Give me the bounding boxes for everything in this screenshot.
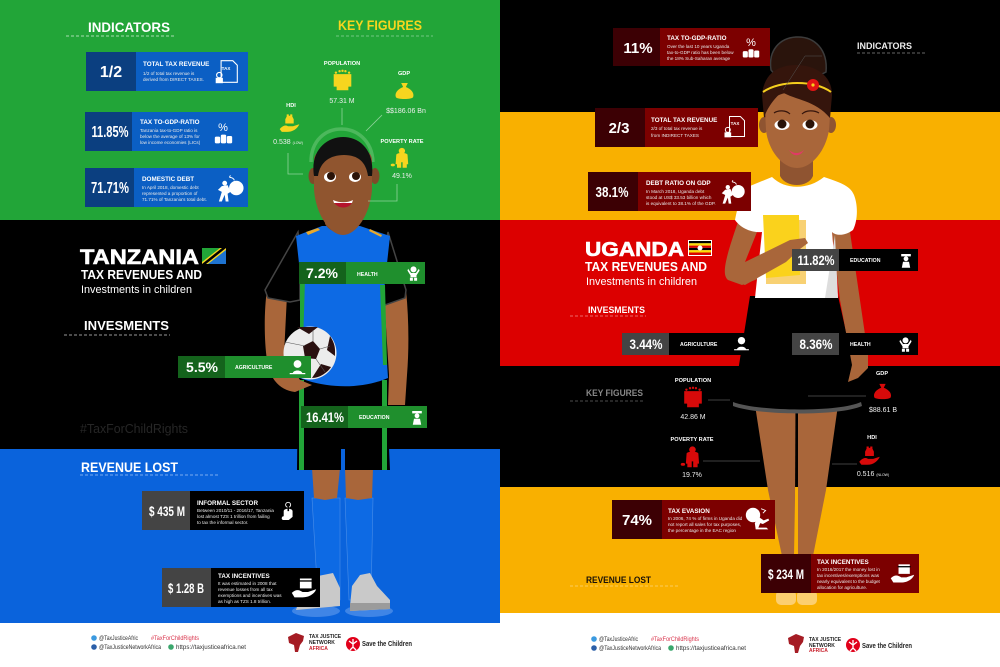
- key figure: GDP Uganda: GDP: [876, 371, 888, 377]
- card: total tax revenue 1/2: [86, 52, 248, 91]
- card: tax incentives $1.28 B: exemptions and incentives was: [218, 593, 282, 598]
- icon: poverty: [391, 148, 408, 168]
- heading: key figures Uganda: KEY FIGURES: [586, 388, 643, 398]
- icon: tax document: TAX: [731, 121, 739, 126]
- heading: key figures Tanzania: KEY FIGURES: [338, 17, 422, 33]
- key figure: GDP Tanzania: [366, 71, 426, 131]
- card: tax incentives $234 M: TAX INCENTIVES: [817, 559, 869, 566]
- logo: Save the Children: [346, 637, 412, 651]
- key figure: population Tanzania: POPULATION: [324, 61, 360, 67]
- footer: Tanzania social links and logos: https://taxjusticeafrica.net: [176, 644, 246, 651]
- card: tax to GDP ratio 11.85%: [85, 112, 248, 151]
- title: Uganda: [585, 239, 712, 288]
- icon: website: [668, 645, 674, 651]
- footer: Uganda social links and logos: https://taxjusticeafrica.net: [676, 645, 746, 652]
- card: tax to GDP ratio 11%: tax-to-GDP ratio has been below: [667, 50, 734, 55]
- logo: Tax Justice Network Africa: NETWORK: [309, 640, 335, 646]
- card: debt ratio on GDP 38.1%: is equivalent to 38.1% of the GDP.: [646, 201, 716, 206]
- bar: agriculture 3.44%: 3.44%: [630, 336, 663, 352]
- bar: agriculture 5.5%: AGRICULTURE: [235, 365, 273, 371]
- panel: Uganda background bands: [500, 0, 1000, 667]
- card: tax evasion 74%: 74%: [622, 512, 652, 529]
- bar: agriculture 3.44%: [622, 333, 749, 355]
- key figure: poverty rate Tanzania: POVERTY RATE: [380, 139, 424, 145]
- card: tax evasion 74%: [612, 500, 775, 539]
- icon: graduate: [412, 411, 422, 425]
- logo: Tax Justice Network Africa: TAX JUSTICE: [309, 634, 342, 640]
- card: tax to GDP ratio 11.85%: below the average of 13% for: [140, 134, 200, 139]
- key figure: poverty rate Tanzania: 49.1%: [392, 173, 412, 180]
- card: debt ratio on GDP 38.1%: 38.1%: [596, 184, 628, 201]
- logo: Save the Children: Save the Children: [862, 641, 912, 650]
- icon: running with bag: [746, 508, 769, 529]
- card: tax to GDP ratio 11%: [613, 28, 770, 66]
- footer: Tanzania social links and logos: #TaxForChildRights: [151, 635, 199, 642]
- boy jersey: [265, 226, 406, 386]
- girl forearm and hand: [735, 238, 808, 285]
- key figure: HDI Uganda: HDI: [867, 435, 877, 441]
- icon: farmer: [290, 360, 305, 374]
- icon: baby: [900, 337, 912, 352]
- bar: agriculture 5.5%: 5.5%: [186, 359, 219, 375]
- card: tax to GDP ratio 11.85%: low income economies (LICs): [140, 140, 201, 145]
- footer: Uganda social links and logos: @TaxJusticeAfric: [599, 636, 638, 643]
- icon: hand with figure: [859, 446, 880, 465]
- footer: Tanzania social links and logos: [91, 633, 412, 652]
- card: debt ratio on GDP 38.1%: In March 2018, Uganda debt: [646, 189, 705, 194]
- card: domestic debt 71.71%: 71.71%: [91, 180, 129, 197]
- footer: Tanzania social links and logos: @TaxJusticeNetworkAfrica: [99, 644, 161, 651]
- card: informal sector $435 M: lost almost TZS 1 trillion from failing: [197, 514, 270, 519]
- card: total tax revenue 1/2: TOTAL TAX REVENUE: [143, 61, 209, 68]
- logo: Tax Justice Network Africa: TAX JUSTICE: [809, 637, 842, 643]
- bar: education 11.82%: [792, 249, 918, 271]
- icon: money bag: [396, 83, 413, 99]
- key figure: GDP Tanzania: $$186.06 Bn: [386, 108, 426, 115]
- panel: Tanzania background bands: [0, 0, 500, 667]
- icon: percent and coins: %: [218, 122, 228, 134]
- icon: gift in hand: [292, 578, 316, 597]
- footer: Tanzania social links and logos: @TaxJusticeAfric: [99, 635, 138, 642]
- heading: revenue lost Tanzania: REVENUE LOST: [81, 459, 178, 475]
- card: tax incentives $1.28 B: $ 1.28 B: [168, 580, 204, 596]
- key figure: poverty rate Tanzania: [368, 139, 424, 201]
- card: total tax revenue 2/3: [595, 108, 758, 147]
- heading: indicators Tanzania: INDICATORS: [88, 19, 170, 35]
- card: debt ratio on GDP 38.1%: DEBT RATIO ON GDP: [646, 180, 711, 187]
- logo: Save the Children: Save the Children: [362, 639, 412, 648]
- title: Uganda: UGANDA: [585, 239, 684, 261]
- icon: gift in hand: [891, 564, 914, 583]
- bar: health 7.2%: HEALTH: [357, 272, 378, 278]
- card: tax to GDP ratio 11.85%: TAX TO-GDP-RATIO: [140, 119, 200, 126]
- card: tax to GDP ratio 11%: Over the last 10 years Uganda: [667, 44, 730, 49]
- card: tax evasion 74%: the percentage in the EAC region: [668, 528, 736, 533]
- icon: hand with figure: [280, 114, 299, 132]
- card: tax to GDP ratio 11%: 11%: [623, 40, 653, 57]
- icon: graduate: [901, 254, 911, 268]
- bar: health 8.36%: [792, 333, 918, 355]
- key figure: GDP Tanzania: GDP: [398, 71, 410, 77]
- hashtag: Tanzania: #TaxForChildRights: [80, 422, 188, 436]
- icon: baby: [408, 266, 420, 281]
- icon: poverty: [681, 446, 699, 467]
- icon: businessman: [282, 502, 293, 520]
- card: tax incentives $234 M: $ 234 M: [768, 566, 804, 582]
- title: Tanzania: TANZANIA: [80, 246, 199, 269]
- heading: investments Uganda: [570, 305, 646, 316]
- key figure: HDI Tanzania: [273, 103, 303, 174]
- card: tax incentives $234 M: tax incentives/exemptions was: [817, 573, 880, 578]
- girl skirt: [733, 296, 862, 414]
- card: domestic debt 71.71%: 71.71% of Tanzania's total debt.: [142, 197, 207, 202]
- logo: Tax Justice Network Africa: [288, 633, 342, 652]
- icon: percent and coins: %: [746, 37, 756, 49]
- key figure: population Tanzania: 57.31 M: [329, 98, 355, 105]
- card: domestic debt 71.71%: In April 2018, domestic debt: [142, 185, 199, 190]
- key figure: population Uganda: 42.86 M: [680, 414, 706, 421]
- card: debt ratio on GDP 38.1%: [588, 172, 751, 211]
- card: tax incentives $1.28 B: It was estimated in 2008 that: [218, 581, 277, 586]
- bar: agriculture 5.5%: [178, 356, 311, 378]
- icon: population: [684, 387, 702, 407]
- card: tax incentives $234 M: allocation for agriculture.: [817, 585, 867, 590]
- card: informal sector $435 M: INFORMAL SECTOR: [197, 500, 258, 507]
- card: informal sector $435 M: Between 2010/11 - 2016/17, Tanzania: [197, 508, 274, 513]
- icon: money bag: [874, 384, 891, 399]
- heading: investments Tanzania: INVESMENTS: [84, 318, 169, 333]
- girl upper left arm: [725, 222, 770, 285]
- icon: twitter: [91, 635, 97, 641]
- card: total tax revenue 1/2: 1/2 of total tax revenue is: [143, 71, 195, 76]
- bar: education 16.41%: [301, 406, 427, 428]
- title: Tanzania: [80, 246, 226, 296]
- card: informal sector $435 M: to tax the informal sector.: [197, 520, 248, 525]
- illustration: girl with book: [725, 37, 868, 605]
- icon: tax document: TAX: [222, 66, 230, 71]
- card: tax incentives $234 M: [761, 554, 919, 593]
- heading: revenue lost Uganda: REVENUE LOST: [586, 575, 651, 585]
- boy socks and shoes: [292, 498, 393, 617]
- footer: Uganda social links and logos: @TaxJusticeNetworkAfrica: [599, 645, 661, 652]
- card: debt ratio on GDP 38.1%: stood at US$ 33.53 billion which: [646, 195, 712, 200]
- icon: percent and coins: [215, 122, 232, 143]
- footer: Uganda social links and logos: #TaxForChildRights: [651, 636, 699, 643]
- card: total tax revenue 2/3: from INDIRECT TAXES: [651, 133, 699, 138]
- card: tax evasion 74%: In 2006, 74 % of firms in Uganda did: [668, 516, 743, 521]
- heading: revenue lost Uganda: [570, 575, 680, 586]
- card: total tax revenue 1/2: 1/2: [100, 64, 122, 81]
- key figure: HDI Tanzania: HDI: [286, 103, 296, 109]
- card: tax to GDP ratio 11.85%: 11.85%: [92, 124, 128, 141]
- bar: health 7.2%: 7.2%: [306, 265, 339, 281]
- icon: population: [334, 70, 351, 90]
- icon: tax document: [724, 116, 744, 137]
- bar: education 11.82%: EDUCATION: [850, 258, 881, 264]
- icon: twitter: [591, 636, 597, 642]
- card: informal sector $435 M: [142, 491, 304, 530]
- key figure: GDP Uganda: [808, 371, 897, 414]
- card: total tax revenue 2/3: TOTAL TAX REVENUE: [651, 117, 717, 124]
- card: informal sector $435 M: $ 435 M: [149, 503, 185, 519]
- icon: tax document: [216, 61, 237, 83]
- card: domestic debt 71.71%: [85, 168, 248, 207]
- heading: investments Uganda: INVESMENTS: [588, 305, 645, 315]
- card: domestic debt 71.71%: DOMESTIC DEBT: [142, 176, 194, 183]
- bar: education 16.41%: EDUCATION: [359, 415, 390, 421]
- bar: education 16.41%: 16.41%: [306, 409, 344, 425]
- icon: website: [168, 644, 174, 650]
- logo: Tax Justice Network Africa: NETWORK: [809, 643, 835, 649]
- logo: Tax Justice Network Africa: AFRICA: [809, 648, 828, 654]
- card: tax incentives $1.28 B: [162, 568, 320, 607]
- bar: health 7.2%: [299, 262, 425, 284]
- card: tax incentives $1.28 B: revenue losses from all tax: [218, 587, 273, 592]
- card: total tax revenue 2/3: 2/3: [609, 120, 629, 137]
- key figure: population Tanzania: [324, 61, 360, 125]
- heading: indicators Uganda: [857, 41, 925, 53]
- icon: facebook: [591, 645, 597, 651]
- boy arms: [265, 290, 408, 405]
- girl shirt: [735, 177, 857, 298]
- illustration: boy with football: [265, 129, 408, 617]
- girl right arm: [832, 232, 868, 382]
- girl head: [759, 37, 836, 185]
- key figure: poverty rate Uganda: POVERTY RATE: [670, 437, 714, 443]
- girl book: [763, 215, 806, 284]
- icon: man carrying debt: [722, 180, 745, 204]
- card: tax evasion 74%: TAX EVASION: [668, 508, 710, 515]
- bar: health 8.36%: HEALTH: [850, 342, 871, 348]
- key figure: population Uganda: POPULATION: [675, 378, 711, 384]
- title: Uganda: TAX REVENUES AND: [585, 260, 707, 274]
- bar: agriculture 3.44%: AGRICULTURE: [680, 342, 718, 348]
- heading: indicators Uganda: INDICATORS: [857, 41, 912, 51]
- card: domestic debt 71.71%: represented a proportion of: [142, 191, 198, 196]
- icon: facebook: [91, 644, 97, 650]
- boy head: [308, 129, 380, 235]
- title: Tanzania: TAX REVENUES AND: [81, 267, 202, 282]
- logo: Save the Children: [846, 638, 912, 652]
- card: tax incentives $1.28 B: as high as TZS 1.8 trillion.: [218, 599, 271, 604]
- icon: percent and coins: [743, 37, 759, 57]
- card: tax incentives $1.28 B: TAX INCENTIVES: [218, 573, 270, 580]
- boy shorts: [297, 380, 390, 470]
- title: Tanzania: Investments in children: [81, 284, 192, 296]
- title: Uganda: Investments in children: [586, 276, 697, 288]
- card: total tax revenue 2/3: 2/3 of total tax revenue is: [651, 126, 703, 131]
- card: tax to GDP ratio 11%: the 18% Sub-Saharan average: [667, 56, 731, 61]
- boy legs: [312, 468, 373, 500]
- key figure: GDP Uganda: $88.61 B: [869, 407, 897, 414]
- bar: health 8.36%: 8.36%: [800, 336, 833, 352]
- key figure: population Uganda: [675, 378, 730, 421]
- key figure: HDI Tanzania: 0.538 (LOW): [273, 139, 303, 146]
- girl feet: [776, 590, 817, 605]
- key figure: poverty rate Uganda: 19.7%: [682, 472, 702, 479]
- football: [284, 326, 336, 380]
- icon: Uganda flag: [688, 240, 712, 256]
- bar: education 11.82%: 11.82%: [798, 252, 835, 268]
- key figure: poverty rate Uganda: [670, 437, 760, 479]
- icon: man carrying debt: [218, 175, 244, 202]
- card: tax evasion 74%: not report all sales for tax purposes,: [668, 522, 741, 527]
- icon: Tanzania flag: [202, 248, 226, 264]
- heading: key figures Uganda: [570, 388, 645, 401]
- card: total tax revenue 1/2: derived from DIRECT TAXES.: [143, 77, 204, 82]
- card: tax to GDP ratio 11.85%: Tanzania tax-to-GDP ratio is: [140, 128, 198, 133]
- key figure: HDI Uganda: 0.516 (NLOW): [857, 471, 889, 478]
- card: tax to GDP ratio 11%: TAX TO-GDP-RATIO: [667, 35, 727, 42]
- icon: farmer: [734, 337, 749, 350]
- key figure: HDI Uganda: [832, 435, 889, 478]
- card: tax incentives $234 M: nearly equivalent to the budget: [817, 579, 881, 584]
- footer: Uganda social links and logos: [591, 634, 912, 654]
- logo: Tax Justice Network Africa: [788, 634, 842, 654]
- logo: Tax Justice Network Africa: AFRICA: [309, 646, 328, 652]
- card: tax incentives $234 M: In 2016/2017 the money lost in: [817, 567, 880, 572]
- girl legs: [755, 405, 838, 556]
